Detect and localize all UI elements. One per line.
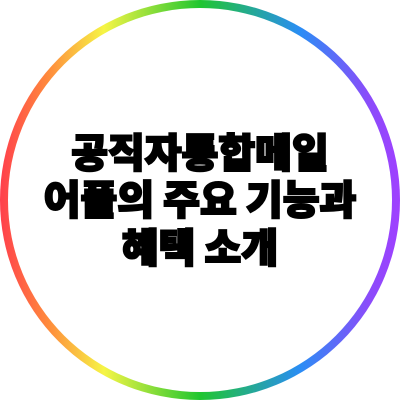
title line 2: 어플의 주요 기능과 [44, 179, 356, 223]
title line 3: 혜택 소개 [122, 227, 278, 271]
title line 1: 공직자통합메일 [71, 132, 329, 176]
